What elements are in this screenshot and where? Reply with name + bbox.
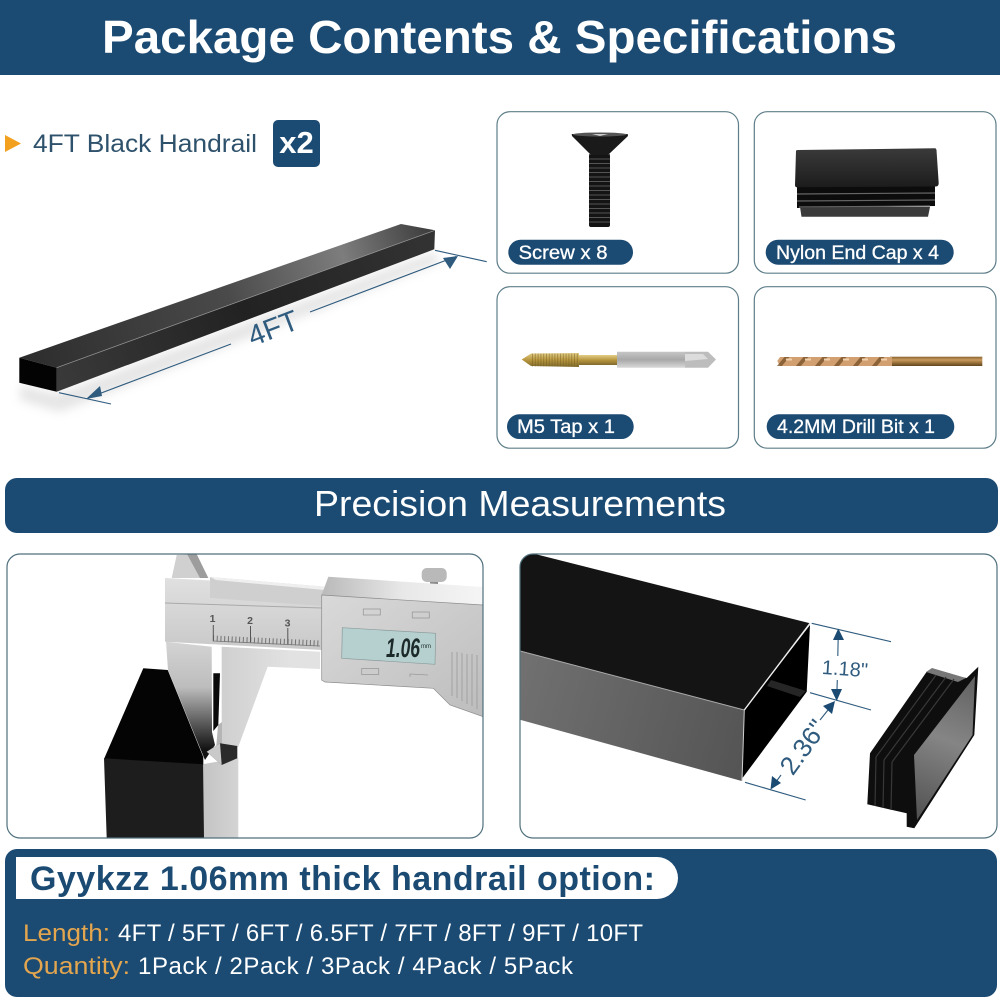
handrail illustration xyxy=(19,224,440,412)
digital readout body: mm xyxy=(421,644,431,650)
panel: nylon end cap xyxy=(754,112,996,273)
title banner xyxy=(0,0,1000,75)
option heading: Gyykzz 1.06mm thick handrail option: xyxy=(30,860,655,898)
pill label: drill bit: 4.2MM Drill Bit x 1 xyxy=(777,417,935,438)
panel: tube dimensions xyxy=(510,550,997,838)
pill label: nylon end cap: Nylon End Cap x 4 xyxy=(776,243,939,264)
caliper illustration xyxy=(104,554,483,838)
ruler scale xyxy=(210,613,320,646)
icon: M5 tap xyxy=(522,352,716,368)
length options: 4FT / 5FT / 6FT / 6.5FT / 7FT / 8FT / 9FT / 10FT xyxy=(118,920,643,947)
pill label: drill bit xyxy=(767,414,954,439)
pill label: M5 tap xyxy=(507,414,634,439)
pill label: screw: Screw x 8 xyxy=(518,243,608,264)
panel: handrail xyxy=(5,120,487,412)
pill label: M5 tap: M5 Tap x 1 xyxy=(517,417,615,438)
icon: drill bit xyxy=(777,357,982,366)
square tube illustration xyxy=(510,550,810,781)
ruler scale: 2 xyxy=(247,615,253,627)
digital readout body xyxy=(322,568,483,717)
dimension label: 4FT: 4FT xyxy=(244,305,303,353)
panel: drill bit xyxy=(754,287,996,448)
quantity options: Quantity: xyxy=(23,953,130,980)
ruler scale: 3 xyxy=(285,618,291,630)
dimension label: 2.36 inch: 2.36" xyxy=(773,714,833,780)
panel: caliper measurement xyxy=(7,554,483,838)
icon: orange arrow xyxy=(5,135,21,152)
dimension label: 1.18 inch: 1.18" xyxy=(821,657,869,682)
icon: nylon end cap xyxy=(795,148,939,217)
quantity options: 1Pack / 2Pack / 3Pack / 4Pack / 5Pack xyxy=(138,953,574,980)
quantity badge xyxy=(273,120,320,167)
section banner: precision measurements xyxy=(5,478,998,533)
dimension arrow: 4FT xyxy=(59,250,487,404)
nylon end cap illustration xyxy=(867,667,978,828)
pill label: screw xyxy=(508,240,633,265)
ruler scale: 1 xyxy=(210,613,216,625)
handrail label: 4FT Black Handrail xyxy=(33,130,257,158)
icon: screw xyxy=(572,132,628,227)
dimension lines xyxy=(745,623,891,800)
panel outline xyxy=(520,554,997,838)
digital readout body: 1.06 xyxy=(386,633,421,663)
section banner: precision measurements: Precision Measurements xyxy=(314,483,726,524)
quantity badge: x2 xyxy=(279,125,314,160)
panel: handrail options xyxy=(5,849,997,997)
panel outline xyxy=(7,554,483,838)
length options: Length: xyxy=(23,920,110,947)
black square tube xyxy=(104,668,238,838)
panel: screw xyxy=(497,112,738,273)
title: Package Contents & Specifications xyxy=(102,11,897,63)
panel: M5 tap xyxy=(497,287,738,448)
